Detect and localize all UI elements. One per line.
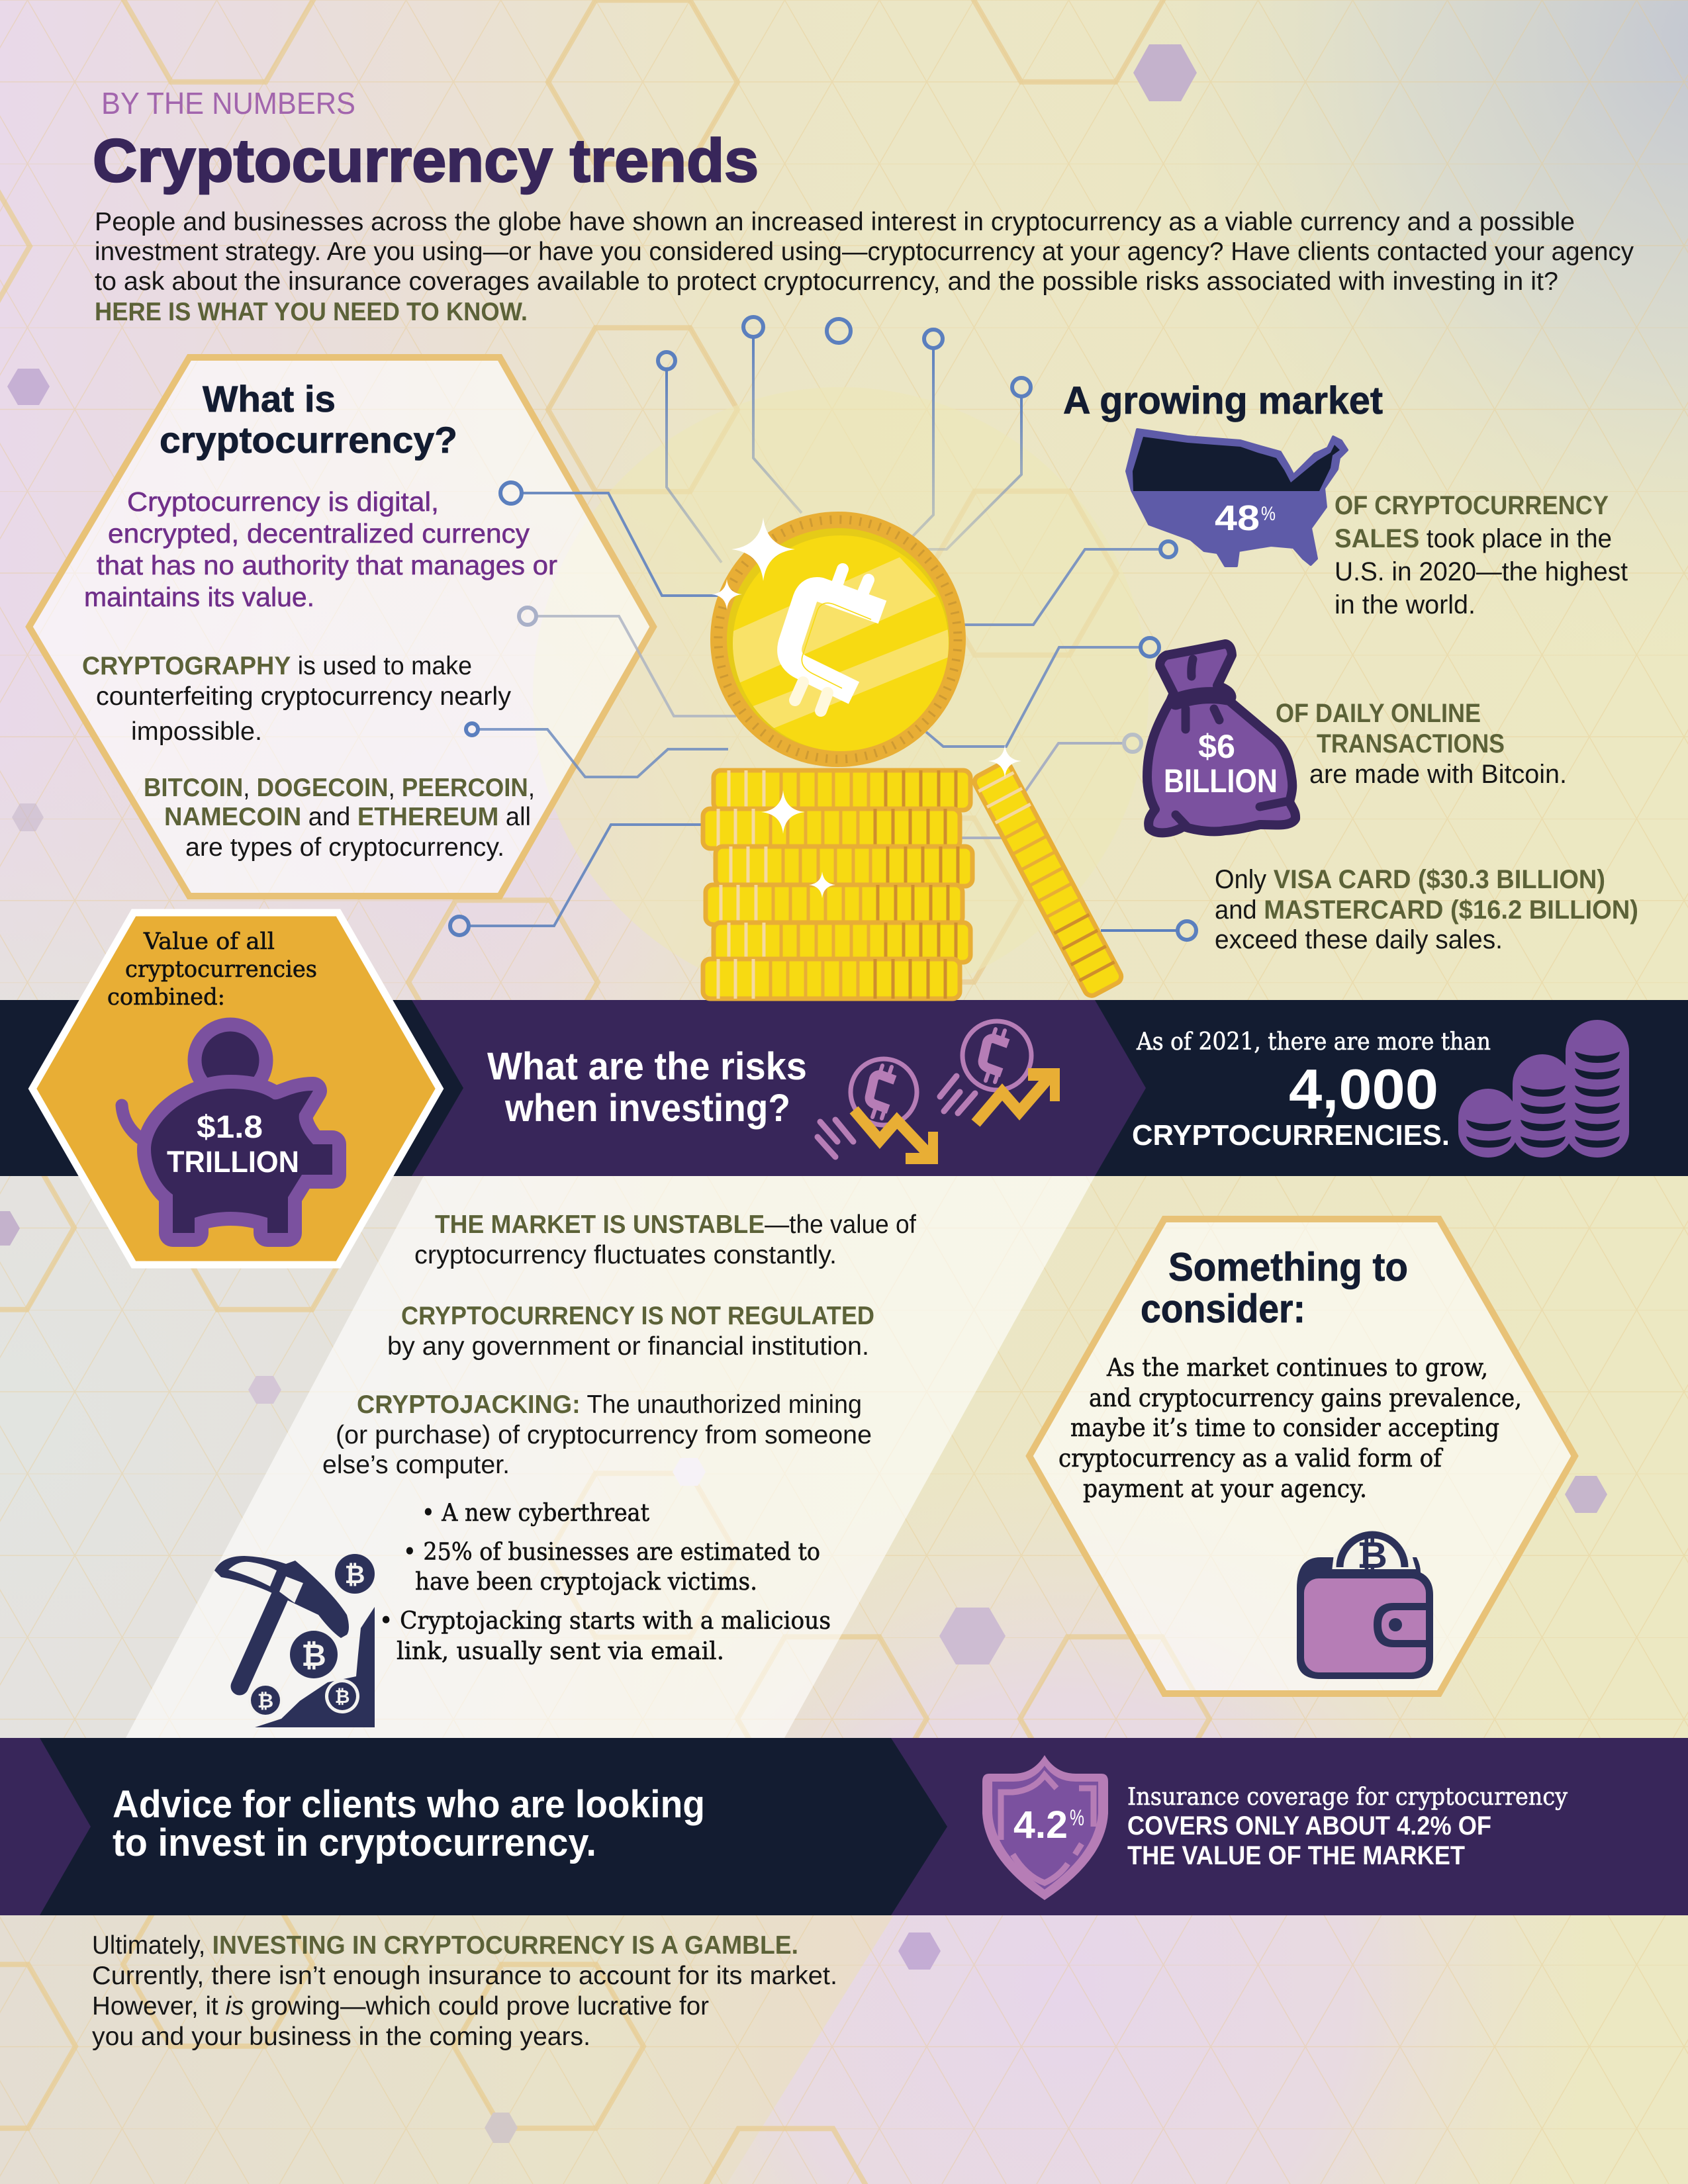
types of cryptocurrency text: are types of cryptocurrency.: [185, 833, 504, 862]
text: insurance coverage: COVERS ONLY ABOUT 4.2% OF: [1127, 1811, 1491, 1841]
glow circle behind coin: [533, 387, 1149, 1003]
text: US sales: [1335, 491, 1628, 619]
icon: pickaxe mining: ₿: [258, 1690, 273, 1713]
heading: what is cryptocurrency: What is: [203, 378, 336, 420]
definition text: Cryptocurrency is digital,: [127, 486, 439, 517]
text: US sales: OF CRYPTOCURRENCY: [1335, 491, 1609, 520]
intro paragraph: [95, 208, 1634, 326]
icon: shield 4.2 percent: [982, 1755, 1108, 1900]
title: Cryptocurrency trends: [93, 127, 759, 195]
text: insurance coverage: [1127, 1784, 1568, 1870]
heading: what are the risks: [487, 1045, 807, 1130]
text: insurance coverage: THE VALUE OF THE MARKET: [1127, 1841, 1465, 1870]
text: cryptojacking bullets: • 25% of businesses are estimated to: [403, 1539, 820, 1566]
text: cryptojacking bullets: [379, 1500, 831, 1665]
text: consider body: [1058, 1353, 1522, 1503]
cryptography text: [82, 652, 512, 746]
text: conclusion: Ultimately, INVESTING IN CRYPTOCURRENCY IS A GAMBLE.: [92, 1931, 798, 1960]
icon: sparkles: [712, 518, 1021, 898]
text: conclusion: Currently, there isn’t enough insurance to account for its market.: [92, 1962, 837, 1990]
text: US sales: SALES took place in the: [1335, 524, 1612, 553]
text: daily online transactions: OF DAILY ONLINE: [1276, 699, 1481, 728]
intro paragraph: HERE IS WHAT YOU NEED TO KNOW.: [95, 298, 528, 326]
icon: money bag 6 billion: $6: [1198, 728, 1235, 765]
panel: what is cryptocurrency hexagon: [29, 357, 653, 896]
text: cryptojacking bullets: • Cryptojacking starts with a malicious: [379, 1608, 831, 1635]
text: 4000 cryptocurrencies: As of 2021, there are more than: [1136, 1028, 1491, 1056]
text: visa and mastercard: Only VISA CARD ($30.3 BILLION): [1215, 865, 1605, 894]
icon: piggy bank: TRILLION: [167, 1145, 299, 1179]
circuit lines: [469, 338, 1178, 931]
text: market is unstable: cryptocurrency fluctuates constantly.: [414, 1241, 837, 1269]
icon: shield 4.2 percent: 4.2: [1013, 1803, 1068, 1846]
eyebrow: by the numbers: BY THE NUMBERS: [101, 86, 355, 120]
definition text: encrypted, decentralized currency: [108, 518, 530, 549]
text: not regulated: by any government or financial institution.: [387, 1332, 869, 1361]
icon: piggy bank: [122, 1024, 332, 1233]
text: consider body: payment at your agency.: [1083, 1475, 1367, 1503]
text: daily online transactions: [1276, 699, 1567, 789]
heading: a growing market: A growing market: [1063, 379, 1383, 422]
text: value of all cryptocurrencies: cryptocurrencies: [125, 956, 317, 983]
definition text: that has no authority that manages or: [97, 550, 557, 580]
text: daily online transactions: are made with Bitcoin.: [1309, 760, 1567, 789]
heading: advice for clients: [113, 1783, 705, 1864]
panel: something to consider hexagon: [1029, 1219, 1575, 1694]
icon: coin columns: [1458, 1020, 1629, 1158]
heading: advice for clients: to invest in cryptocurrency.: [113, 1821, 596, 1864]
definition text: [84, 486, 557, 612]
intro paragraph: to ask about the insurance coverages available to protect cryptocurrency, and the possible risks associated with investing in it?: [95, 267, 1558, 296]
text: cryptojacking: (or purchase) of cryptocurrency from someone: [336, 1421, 872, 1449]
intro paragraph: People and businesses across the globe have shown an increased interest in cryptocurrency as a viable currency and a possible: [95, 208, 1575, 236]
icon: pickaxe mining: ₿: [301, 1637, 326, 1673]
heading: advice for clients: Advice for clients who are looking: [113, 1783, 705, 1826]
text: consider body: As the market continues to grow,: [1106, 1353, 1488, 1382]
text: 4000 cryptocurrencies: 4,000: [1289, 1058, 1438, 1121]
text: market is unstable: THE MARKET IS UNSTABLE—the value of: [435, 1210, 916, 1239]
icon: money bag 6 billion: [1147, 644, 1295, 833]
icon: coin stack: [703, 770, 972, 999]
text: insurance coverage: Insurance coverage for cryptocurrency: [1127, 1784, 1568, 1811]
types of cryptocurrency text: [144, 774, 535, 862]
bands: dark banner 1: [0, 1000, 1688, 1176]
heading: what is cryptocurrency: [160, 378, 457, 461]
icon: US map 48 percent: %: [1261, 503, 1276, 525]
text: value of all cryptocurrencies: combined:: [107, 984, 225, 1011]
text: cryptojacking: else’s computer.: [322, 1451, 510, 1479]
text: cryptojacking: CRYPTOJACKING: The unauthorized mining: [357, 1390, 862, 1419]
text: not regulated: CRYPTOCURRENCY IS NOT REGULATED: [401, 1302, 874, 1330]
text: consider body: and cryptocurrency gains prevalence,: [1089, 1384, 1522, 1412]
text: not regulated: [387, 1302, 874, 1361]
intro paragraph: investment strategy. Are you using—or have you considered using—cryptocurrency at your agency? Have clients contacted your agency: [95, 238, 1634, 266]
icon: money bag 6 billion: BILLION: [1164, 762, 1278, 799]
heading: what is cryptocurrency: cryptocurrency?: [160, 419, 457, 461]
cryptography text: counterfeiting cryptocurrency nearly: [96, 682, 512, 711]
text: value of all cryptocurrencies: Value of all: [143, 929, 275, 955]
heading: what are the risks: What are the risks: [487, 1045, 807, 1088]
text: visa and mastercard: exceed these daily sales.: [1215, 925, 1503, 954]
text: cryptojacking: [322, 1390, 872, 1479]
cryptography text: CRYPTOGRAPHY is used to make: [82, 652, 472, 680]
icon: wallet with bitcoin: ₿: [1357, 1534, 1387, 1577]
heading: something to consider: [1141, 1245, 1408, 1331]
text: visa and mastercard: and MASTERCARD ($16.2 BILLION): [1215, 895, 1638, 925]
icon: US map 48 percent: 48: [1215, 498, 1260, 538]
text: conclusion: However, it is growing—which could prove lucrative for: [92, 1992, 709, 2021]
cryptography text: impossible.: [131, 717, 262, 746]
text: daily online transactions: TRANSACTIONS: [1317, 729, 1505, 758]
panel: gold hexagon total value: [32, 913, 440, 1265]
bands: banner 2: [0, 1738, 1688, 1915]
panel: risks white area: [126, 1176, 1095, 1738]
heading: what are the risks: when investing?: [504, 1087, 790, 1130]
icon: big coin: [710, 512, 966, 767]
text: cryptojacking bullets: have been cryptojack victims.: [415, 1569, 757, 1596]
text: cryptojacking bullets: link, usually sent via email.: [397, 1638, 724, 1665]
heading: something to consider: Something to: [1168, 1245, 1408, 1289]
text: US sales: in the world.: [1335, 590, 1476, 619]
circuit nodes: [450, 317, 1196, 940]
definition text: maintains its value.: [84, 582, 314, 612]
icon: pickaxe mining: [214, 1554, 375, 1727]
icon: US map 48 percent: [1127, 430, 1347, 566]
text: 4000 cryptocurrencies: [1132, 1028, 1491, 1152]
text: consider body: cryptocurrency as a valid form of: [1058, 1444, 1443, 1473]
text: value of all cryptocurrencies: [107, 929, 317, 1011]
icon: leaning coin stack: [972, 760, 1124, 998]
text: conclusion: you and your business in the coming years.: [92, 2023, 590, 2051]
icon: wallet with bitcoin: [1297, 1534, 1433, 1679]
text: cryptojacking bullets: • A new cyberthreat: [422, 1500, 649, 1527]
icon: coin rising: [940, 1021, 1060, 1123]
text: visa and mastercard: [1215, 865, 1638, 954]
text: market is unstable: [414, 1210, 916, 1269]
icon: shield 4.2 percent: %: [1070, 1805, 1084, 1831]
icon: pickaxe mining: ₿: [335, 1686, 350, 1707]
types of cryptocurrency text: NAMECOIN and ETHEREUM all: [164, 803, 531, 831]
icon: pickaxe mining: ₿: [345, 1560, 365, 1589]
text: consider body: maybe it’s time to consider accepting: [1070, 1414, 1499, 1442]
icon: coin falling: [818, 1059, 938, 1164]
heading: something to consider: consider:: [1141, 1287, 1305, 1331]
text: conclusion: [92, 1931, 837, 2051]
text: US sales: U.S. in 2020—the highest: [1335, 557, 1628, 586]
icon: piggy bank: $1.8: [197, 1110, 263, 1145]
types of cryptocurrency text: BITCOIN, DOGECOIN, PEERCOIN,: [144, 774, 535, 802]
text: 4000 cryptocurrencies: CRYPTOCURRENCIES.: [1132, 1119, 1450, 1152]
